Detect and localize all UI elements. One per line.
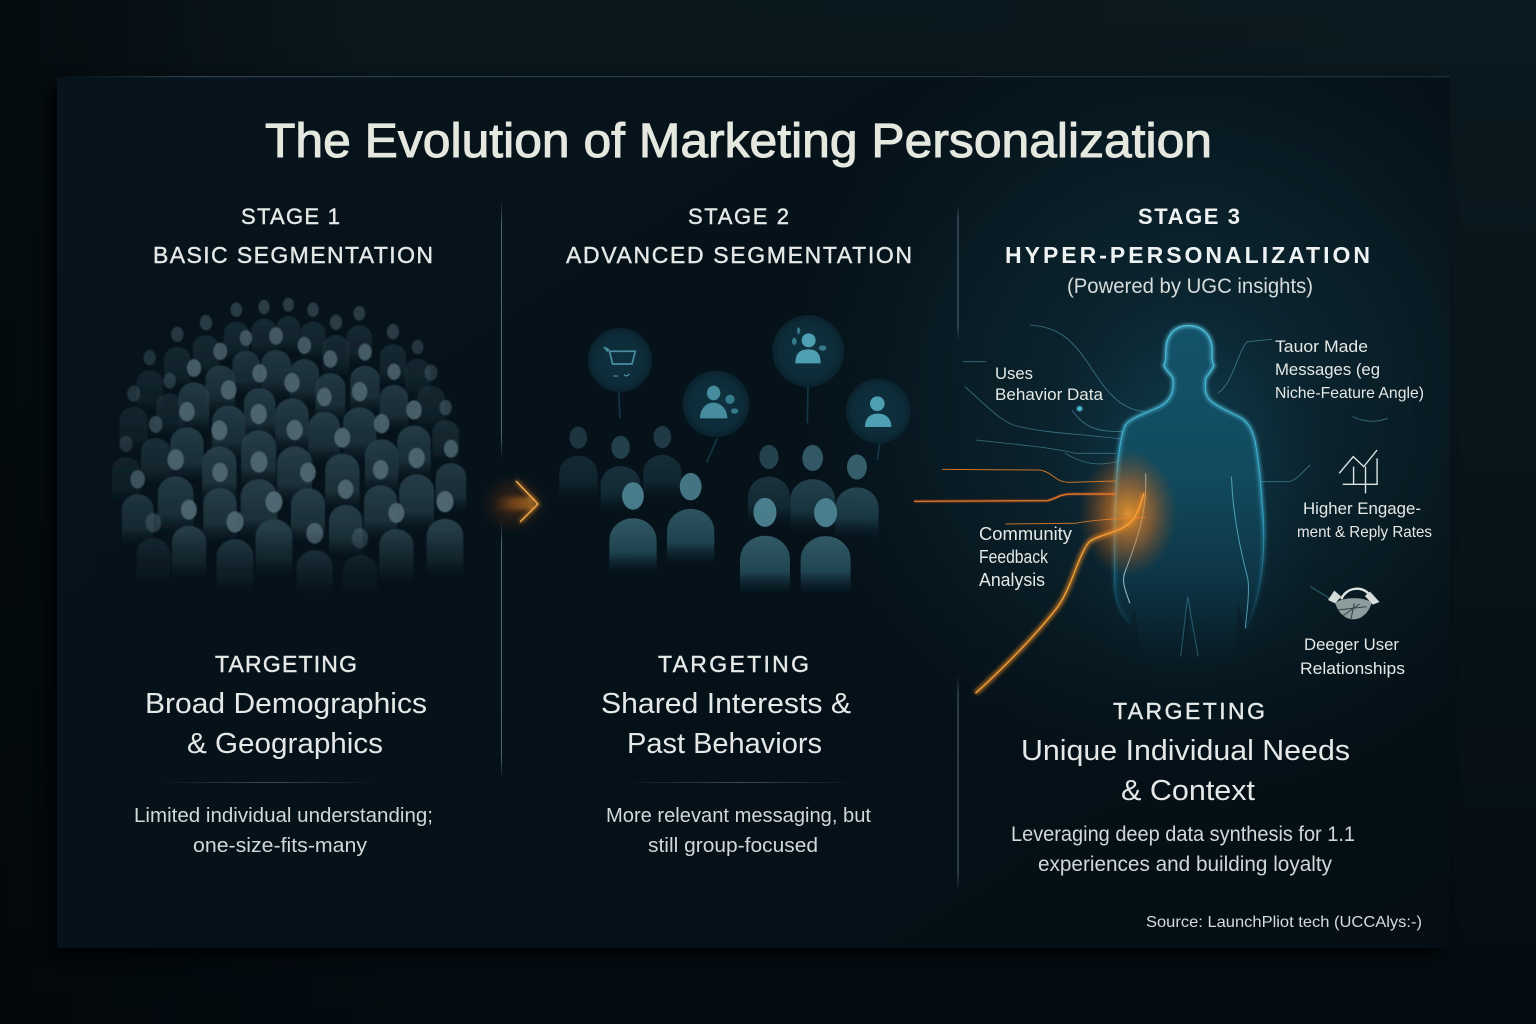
stage 2 description: still group-focused [648, 835, 818, 857]
stage 1 targeting text: & Geographics [187, 728, 383, 760]
icon: person with leaves bubble [772, 315, 844, 423]
panel: stage 2 advanced segmentation [559, 204, 912, 857]
right group of people [740, 445, 879, 595]
stage 2 targeting text: TARGETING [658, 651, 809, 677]
stage 3 targeting text [1021, 698, 1350, 807]
icon: person with group bubble [683, 371, 749, 463]
stage 1 heading [153, 204, 433, 268]
callout: uses behavior data [995, 364, 1104, 404]
icon: handshake [1328, 589, 1380, 620]
callout: tailor made messages: Messages (eg [1275, 360, 1380, 379]
stage 1 targeting text: TARGETING [215, 651, 357, 677]
icon: shopping cart bubble [588, 328, 652, 418]
panel: stage 3 hyper-personalization [914, 204, 1432, 931]
callout: community feedback analysis [979, 524, 1072, 590]
stage 3 targeting text: Unique Individual Needs [1021, 735, 1350, 767]
stage 2 heading [566, 204, 912, 268]
stage 3 heading: (Powered by UGC insights) [1067, 275, 1313, 298]
stage 2 heading: ADVANCED SEGMENTATION [566, 242, 912, 268]
callout: deeper user relationships: Deeger User [1304, 635, 1399, 654]
callout: tailor made messages: Tauor Made [1275, 337, 1368, 356]
stage 3 heading: STAGE 3 [1138, 204, 1240, 229]
callout: community feedback analysis: Analysis [979, 570, 1045, 590]
stage 3 description: Leveraging deep data synthesis for 1.1 [1011, 823, 1355, 846]
stage 1 heading: STAGE 1 [241, 204, 340, 229]
stage 3 heading: HYPER-PERSONALIZATION [1005, 242, 1370, 268]
title: The Evolution of Marketing Personalization [265, 115, 1212, 168]
stage 3 targeting text: TARGETING [1113, 698, 1265, 724]
stage 2 heading: STAGE 2 [688, 204, 789, 229]
arrow: stage 1 to stage 2 [480, 474, 548, 534]
illustration: broad crowd [112, 298, 466, 614]
illustration: interest groups [559, 315, 911, 595]
icon: rising chart [1339, 450, 1377, 493]
stage 1 targeting text [145, 651, 427, 760]
stage 1 description: one-size-fits-many [193, 835, 367, 857]
stage 3 description [1011, 823, 1355, 876]
main card panel [50, 76, 1450, 956]
callout: uses behavior data: Uses [995, 364, 1033, 383]
source note: Source: LaunchPliot tech (UCCAlys:-) [1146, 914, 1422, 931]
illustration: glowing human figure with data streams [914, 283, 1388, 693]
callout: higher engagement: Higher Engage- [1303, 499, 1421, 518]
stage 2 targeting text [601, 651, 851, 760]
callout: higher engagement: ment & Reply Rates [1297, 524, 1432, 541]
callout: tailor made messages: Niche-Feature Angle) [1275, 385, 1424, 402]
stage 2 targeting text: Past Behaviors [627, 728, 822, 760]
stage 3 targeting text: & Context [1121, 775, 1255, 807]
stage 1 description [134, 805, 433, 857]
figure silhouette [1114, 326, 1264, 663]
stage 1 targeting text: Broad Demographics [145, 688, 427, 720]
callout: tailor made messages [1275, 337, 1424, 402]
panel: stage 1 basic segmentation [95, 204, 495, 857]
stage 3 heading [1005, 204, 1370, 298]
stage 2 targeting text: Shared Interests & [601, 688, 851, 720]
stage 3 description: experiences and building loyalty [1038, 853, 1332, 876]
stage 1 description: Limited individual understanding; [134, 805, 433, 827]
callout: community feedback analysis: Community [979, 524, 1072, 544]
stage 2 description [606, 805, 871, 857]
left group of people [559, 426, 714, 574]
callout: higher engagement [1297, 499, 1432, 541]
callout: uses behavior data: Behavior Data [995, 385, 1104, 404]
icon: person bubble [846, 379, 911, 460]
stage 1 heading: BASIC SEGMENTATION [153, 242, 433, 268]
orange glow and data streams [914, 450, 1177, 693]
callout: deeper user relationships [1300, 635, 1405, 678]
blue data lines [963, 325, 1388, 598]
stage 2 description: More relevant messaging, but [606, 805, 871, 827]
callout: community feedback analysis: Feedback [979, 547, 1049, 567]
callout: deeper user relationships: Relationships [1300, 659, 1405, 678]
